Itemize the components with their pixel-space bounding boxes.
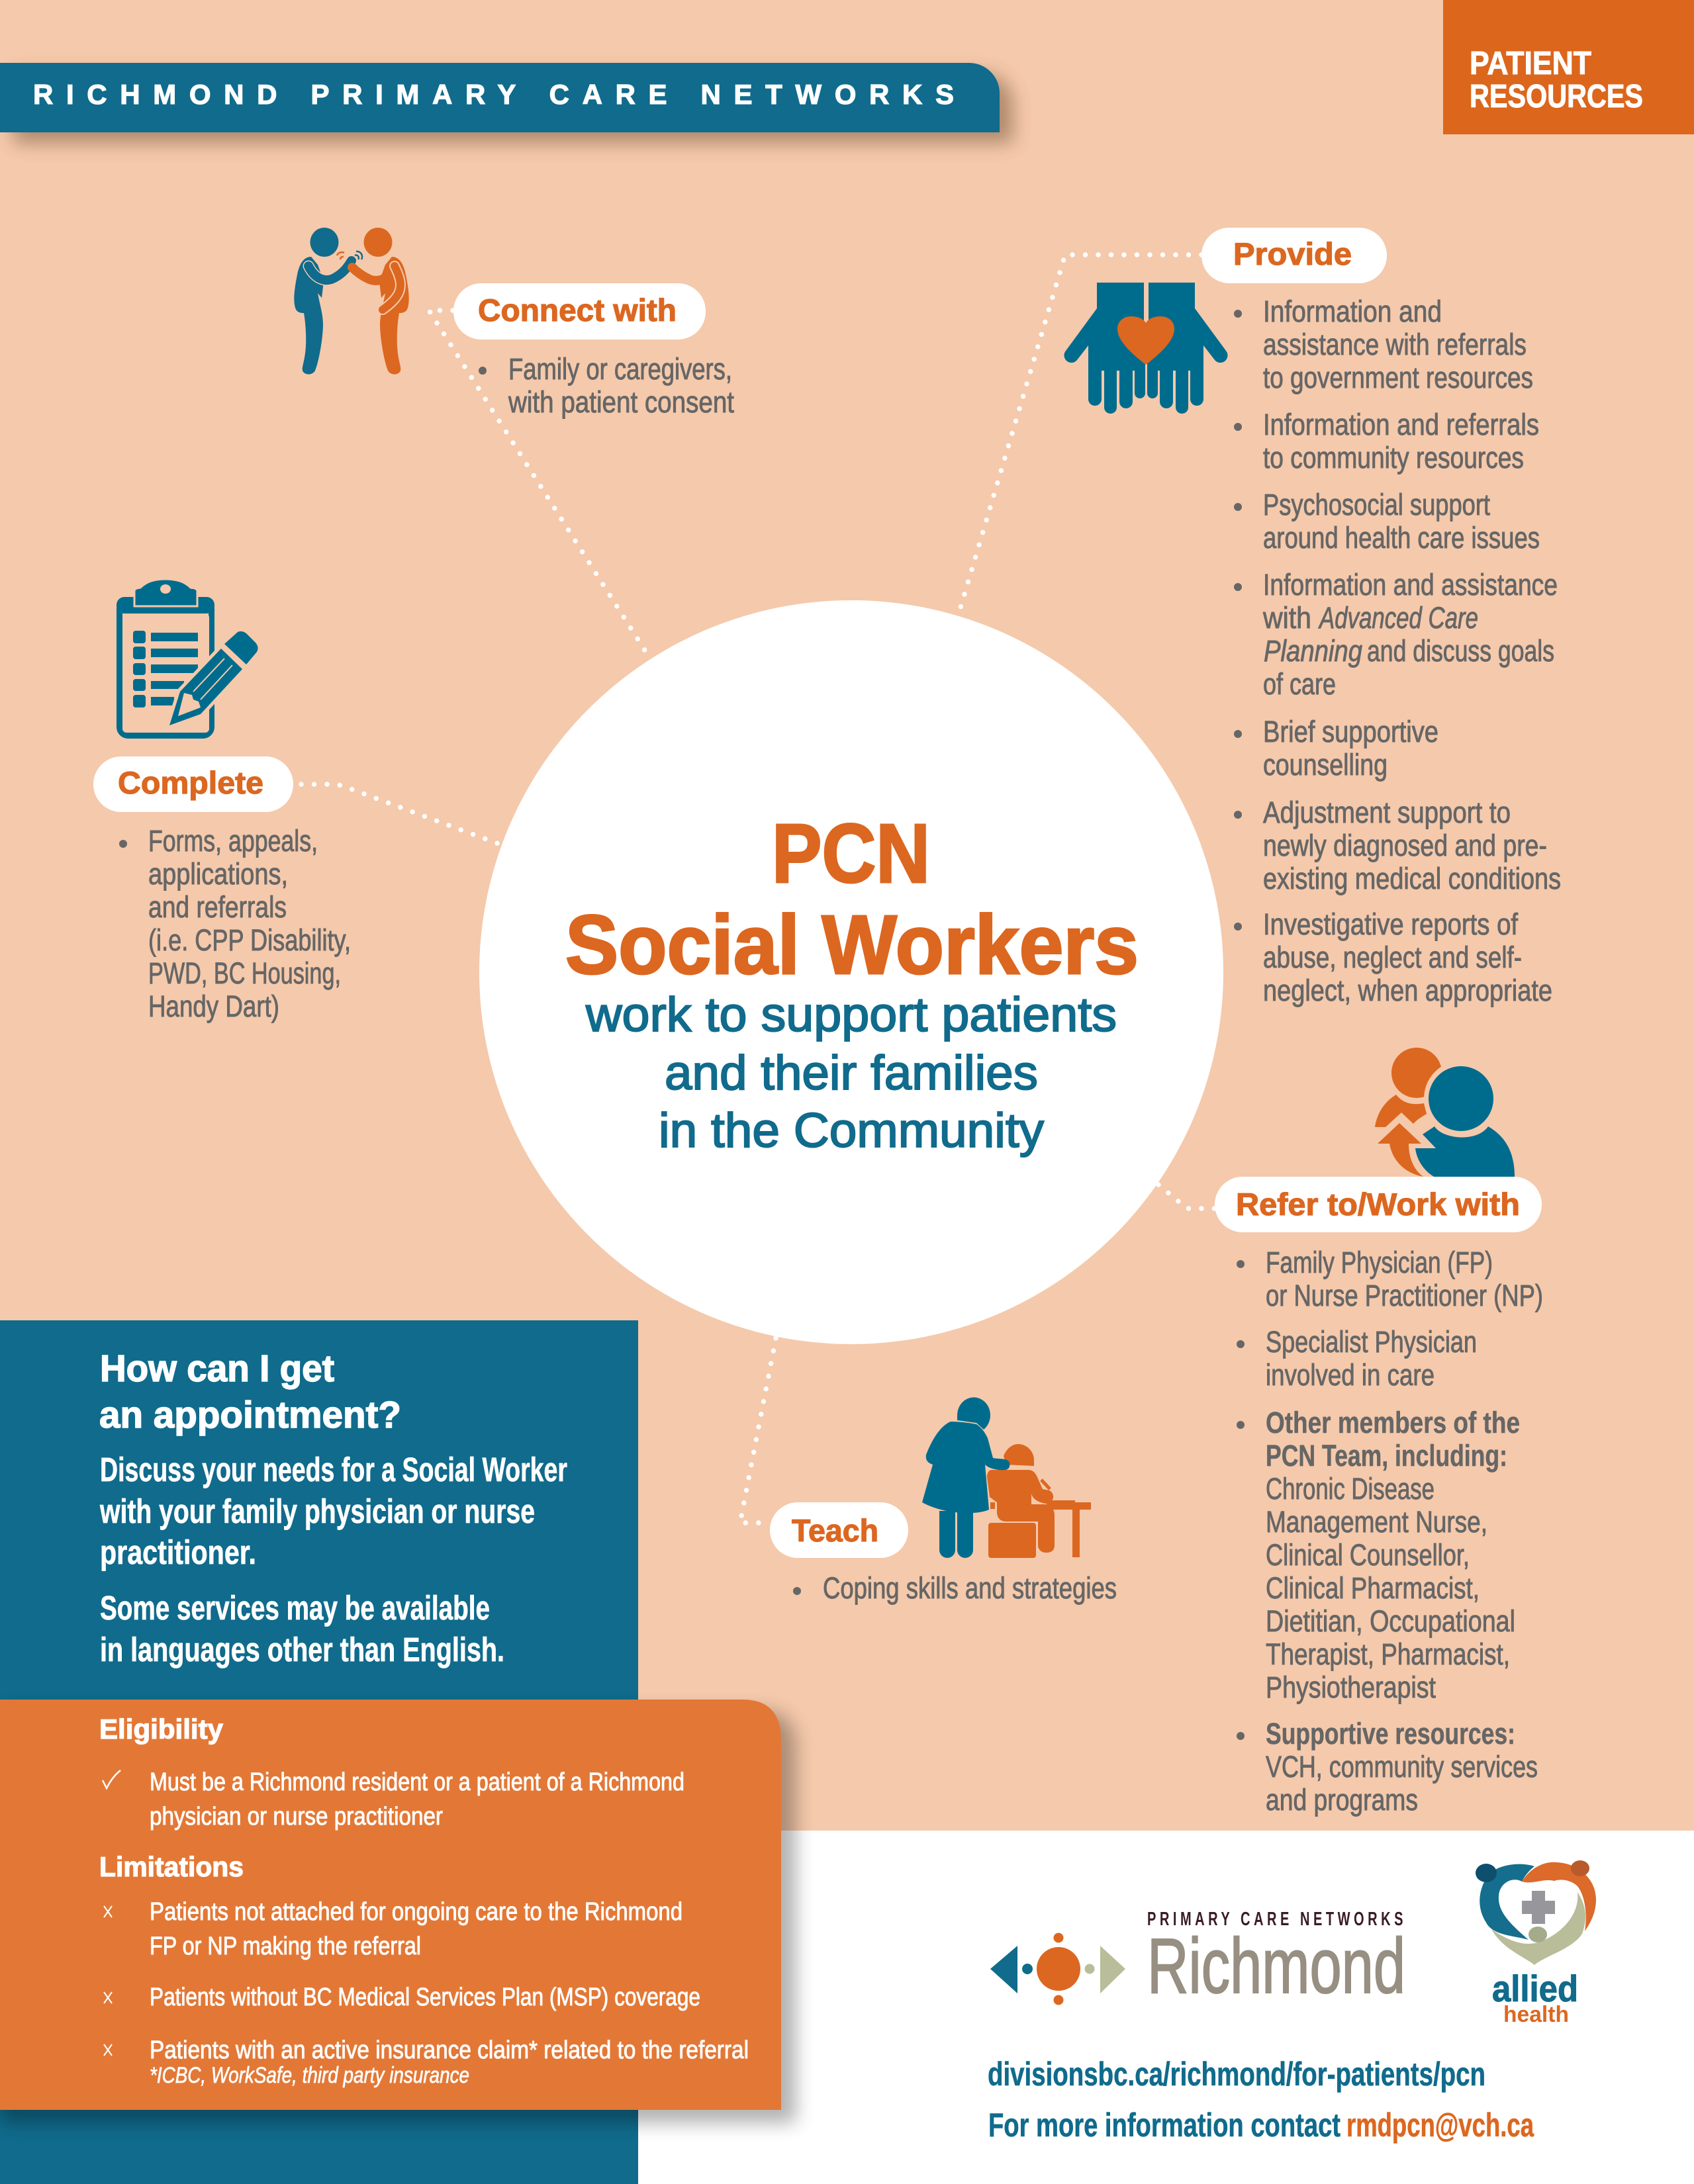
subtitle: and their families <box>665 1046 1038 1100</box>
bullet list: provide: Adjustment support to <box>1263 796 1511 829</box>
text block: appointment details: practitioner. <box>100 1533 256 1571</box>
dotted connector: connect with <box>429 310 650 659</box>
bullet list: provide: Information and assistance <box>1263 568 1558 602</box>
title <box>565 807 1139 991</box>
panel: complete <box>93 579 351 1023</box>
bullet list: provide: abuse, neglect and self- <box>1263 940 1522 974</box>
bullet list: refer to / work with: Family Physician (FP) <box>1266 1246 1493 1279</box>
logo: Richmond primary care networks: Richmond <box>1147 1923 1405 2010</box>
logo: allied health <box>1476 1860 1596 2027</box>
section: limitations: Patients not attached for ongoing care to the Richmond <box>150 1898 682 1926</box>
subtitle: in the Community <box>659 1104 1045 1158</box>
dotted connector: refer to <box>1158 1185 1217 1208</box>
bullet list: refer to / work with: Specialist Physician <box>1266 1325 1477 1359</box>
heading: appointment: an appointment? <box>99 1394 401 1436</box>
heading: connect with: Connect with <box>478 293 677 328</box>
panel: connect with <box>294 228 734 419</box>
contact line: rmdpcn@vch.ca <box>1346 2107 1534 2144</box>
text block: appointment details: with your family physician or nurse <box>99 1492 535 1530</box>
tag: patient resources: PATIENT <box>1470 46 1591 81</box>
bullet list: complete: (i.e. CPP Disability, <box>148 923 351 957</box>
bullet list: provide: Planning <box>1264 634 1362 668</box>
tag: patient resources: RESOURCES <box>1470 79 1643 114</box>
bullet list: refer to / work with: Management Nurse, <box>1266 1505 1487 1539</box>
subtitle <box>585 988 1117 1158</box>
subtitle: work to support patients <box>585 988 1117 1042</box>
dotted connector: teach <box>740 1338 776 1523</box>
section: limitations: FP or NP making the referral <box>150 1933 421 1960</box>
bullet list: teach: Coping skills and strategies <box>823 1571 1117 1605</box>
panel: eligibility and limitations <box>0 1700 796 2123</box>
dotted connector: complete <box>301 784 500 844</box>
bullet list: provide: Brief supportive <box>1263 715 1438 749</box>
bullet list: provide: counselling <box>1263 748 1388 782</box>
icon: two people with arrow <box>1375 1048 1515 1177</box>
title: PCN <box>772 807 930 900</box>
heading: teach: Teach <box>792 1513 878 1548</box>
bullet list: provide: Investigative reports of <box>1263 907 1518 941</box>
bullet list: provide: and discuss goals <box>1367 634 1554 668</box>
bullet list: provide: neglect, when appropriate <box>1263 974 1552 1007</box>
bullet list: refer to / work with: Physiotherapist <box>1266 1670 1436 1704</box>
heading: provide <box>1201 228 1387 283</box>
tag: patient resources <box>1443 0 1694 134</box>
bullet list: provide: assistance with referrals <box>1263 328 1527 361</box>
bullet list: refer to / work with: VCH, community services <box>1266 1750 1538 1784</box>
central circle <box>479 600 1223 1344</box>
heading: complete: Complete <box>118 765 263 800</box>
bullet list: refer to / work with: Dietitian, Occupational <box>1266 1604 1515 1638</box>
bullet list: provide: Information and <box>1263 295 1442 328</box>
bullet list: refer to / work with: Therapist, Pharmacist, <box>1266 1637 1510 1671</box>
bullet list: provide: with <box>1262 601 1311 635</box>
text block: appointment details: Discuss your needs for a Social Worker <box>100 1451 567 1488</box>
heading: refer to / work with <box>1215 1177 1542 1232</box>
heading: complete <box>93 756 293 812</box>
bullet list: provide: Information and referrals <box>1263 408 1539 441</box>
logo: Richmond primary care networks <box>990 1909 1407 2010</box>
panel: how can I get an appointment <box>0 1320 638 2184</box>
bullet list: connect with: with patient consent <box>508 385 734 419</box>
title: Social Workers <box>565 898 1139 991</box>
bullet list: refer to / work with: Chronic Disease <box>1266 1472 1435 1506</box>
bullet list: provide <box>1234 295 1561 1007</box>
bullet list: refer to / work with: Clinical Pharmacist, <box>1266 1571 1480 1605</box>
logo: Richmond primary care networks: PRIMARY CARE NETWORKS <box>1147 1909 1407 1930</box>
bullet list: refer to / work with: Clinical Counsellor, <box>1266 1538 1470 1572</box>
heading: refer to / work with: Refer to/Work with <box>1236 1187 1520 1222</box>
section: limitations <box>99 1851 749 2088</box>
heading: provide: Provide <box>1233 236 1352 271</box>
bullet list: refer to / work with: Supportive resources: <box>1266 1717 1515 1751</box>
bullet list: refer to / work with <box>1237 1246 1543 1817</box>
bullet list: complete: PWD, BC Housing, <box>148 956 341 990</box>
section: eligibility: Must be a Richmond resident or a patient of a Richmond <box>150 1768 684 1796</box>
text block: appointment details <box>99 1451 567 1668</box>
bullet list: provide: Psychosocial support <box>1263 488 1490 522</box>
section: eligibility <box>99 1713 684 1831</box>
section: limitations: *ICBC, WorkSafe, third party insurance <box>150 2063 469 2088</box>
panel: provide <box>1064 228 1561 1007</box>
text block: appointment details: Some services may be available <box>100 1589 490 1627</box>
bullet list: provide: around health care issues <box>1263 521 1540 555</box>
logo: allied health: allied <box>1492 1968 1578 2009</box>
bullet list: complete: and referrals <box>148 890 287 924</box>
bullet list: provide: newly diagnosed and pre- <box>1263 829 1547 862</box>
bullet list: provide: existing medical conditions <box>1263 862 1561 895</box>
section: limitations: Limitations <box>99 1851 244 1882</box>
bullet list: provide: Advanced Care <box>1318 601 1478 635</box>
panel: teach <box>770 1397 1117 1605</box>
section: limitations: Patients without BC Medical Services Plan (MSP) coverage <box>150 1983 700 2011</box>
icon: two people shaking hands <box>294 228 409 375</box>
bullet list: connect with: Family or caregivers, <box>508 352 732 386</box>
heading: connect with <box>453 283 706 340</box>
header banner: RICHMOND PRIMARY CARE NETWORKS <box>33 79 954 110</box>
bullet list: connect with <box>479 352 734 419</box>
section: limitations: Patients with an active insurance claim* related to the referral <box>150 2036 749 2064</box>
bullet list: complete: applications, <box>148 857 288 891</box>
bullet list: refer to / work with: and programs <box>1266 1783 1418 1817</box>
website link: divisionsbc.ca/richmond/for-patients/pcn <box>988 2056 1485 2093</box>
panel: refer to / work with <box>1215 1048 1543 1817</box>
logo: allied health: health <box>1503 2002 1569 2027</box>
heading: appointment: How can I get <box>100 1347 334 1390</box>
icon: caregiver teaching seated person <box>922 1397 1091 1558</box>
contact line: For more information contact <box>988 2107 1341 2144</box>
bullet list: complete: Forms, appeals, <box>148 824 318 858</box>
icon: clipboard and pencil <box>117 579 258 736</box>
bullet list: provide: of care <box>1263 667 1336 701</box>
bullet list: complete <box>119 824 351 1023</box>
text block: appointment details: in languages other than English. <box>100 1631 504 1668</box>
bullet list: refer to / work with: involved in care <box>1266 1358 1435 1392</box>
bullet list: provide: to community resources <box>1263 441 1524 475</box>
icon: hands holding heart <box>1064 283 1227 414</box>
section: eligibility: Eligibility <box>99 1713 224 1745</box>
bullet list: provide: to government resources <box>1263 361 1533 394</box>
dotted connector: provide <box>959 255 1201 614</box>
bullet list: complete: Handy Dart) <box>148 989 279 1023</box>
heading: appointment <box>99 1347 401 1436</box>
section: eligibility: physician or nurse practitioner <box>150 1803 443 1831</box>
header banner <box>0 63 1013 143</box>
bullet list: refer to / work with: Other members of the <box>1266 1406 1520 1439</box>
bullet list: refer to / work with: PCN Team, including: <box>1266 1439 1507 1473</box>
bullet list: refer to / work with: or Nurse Practitioner (NP) <box>1266 1279 1543 1312</box>
heading: teach <box>770 1502 908 1558</box>
